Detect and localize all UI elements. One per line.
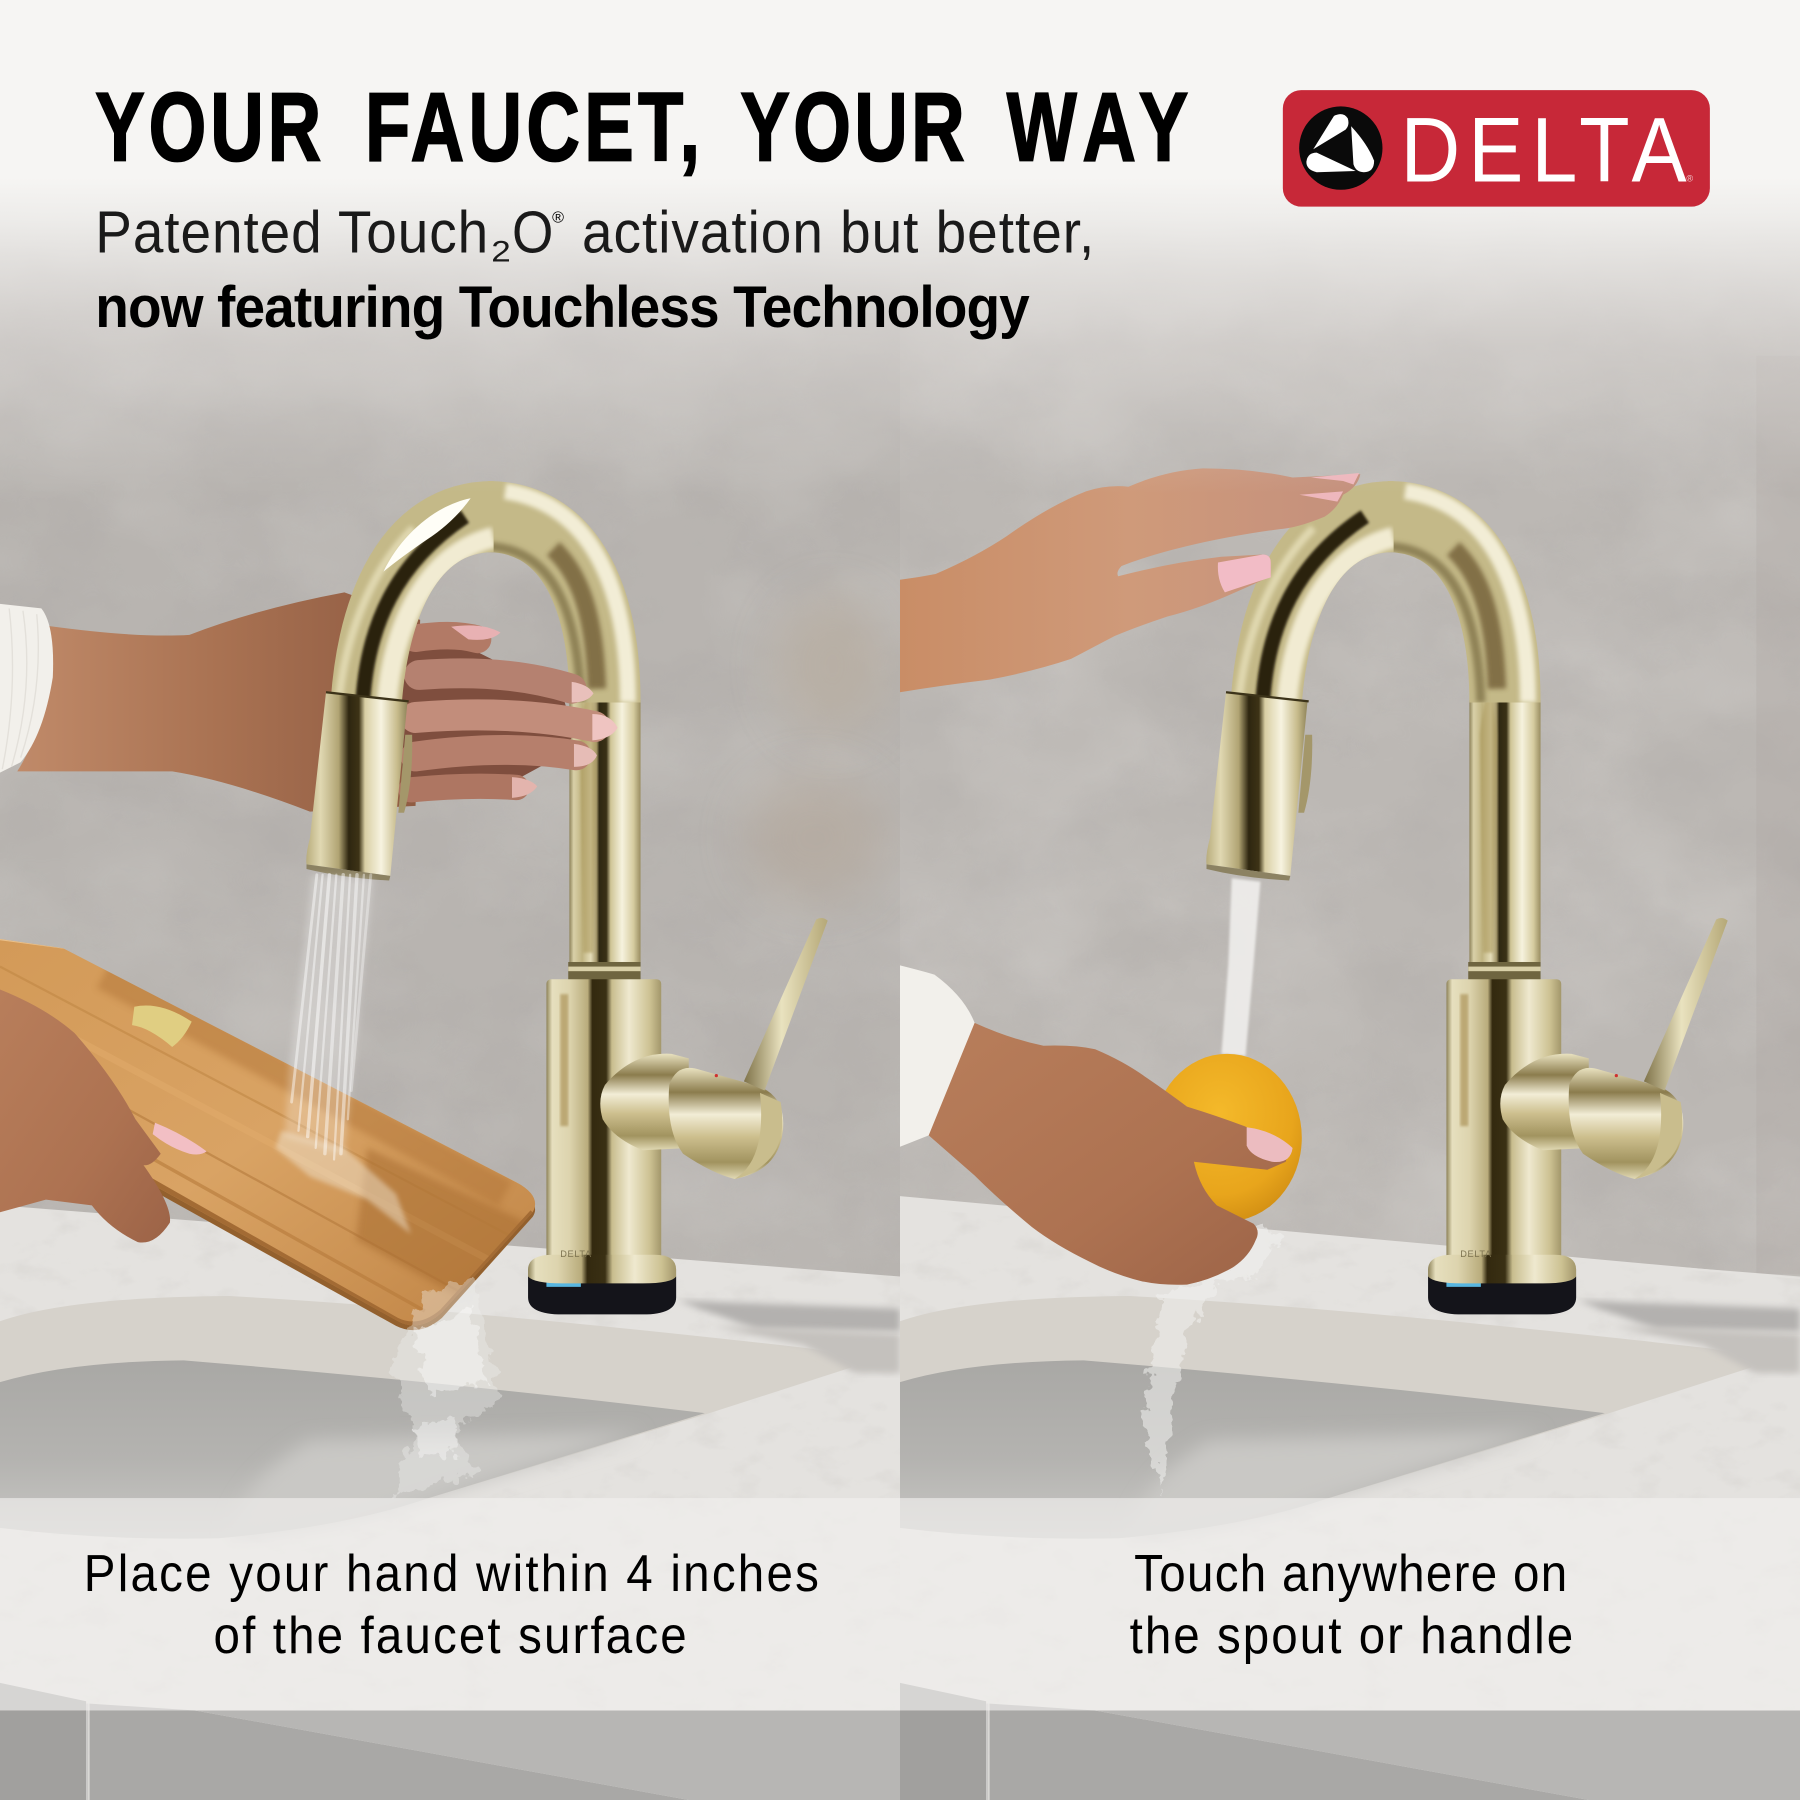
water splash below board bbox=[390, 1280, 499, 1495]
title bbox=[95, 74, 1188, 182]
nail: thumb bbox=[1218, 554, 1271, 592]
top fade overlay bbox=[0, 0, 1800, 494]
thumb nail bbox=[1247, 1127, 1293, 1162]
title: YOUR bbox=[740, 74, 965, 182]
sweater cuff: right bbox=[900, 965, 979, 1147]
wall: right bbox=[900, 0, 1800, 1286]
panel: left photo, hand near faucet bbox=[0, 226, 900, 1800]
title: YOUR bbox=[95, 74, 321, 182]
faucet column and base: left bbox=[488, 491, 828, 1314]
caption text: right bbox=[1130, 1544, 1573, 1665]
lemon slice on board bbox=[132, 1006, 192, 1047]
title: WAY bbox=[1007, 74, 1188, 182]
icon: Delta triangle mark bbox=[1299, 106, 1382, 190]
subtitle: O bbox=[512, 199, 553, 266]
faucet: right bbox=[1206, 491, 1728, 1314]
panel: right photo, hand touching faucet bbox=[900, 0, 1800, 1800]
countertop and sink: left bbox=[0, 1205, 900, 1800]
subtitle bbox=[95, 199, 1094, 341]
water runoff: right bbox=[1142, 1223, 1283, 1492]
fingers bbox=[402, 636, 595, 798]
caption band: left bbox=[0, 1498, 900, 1710]
lemon bbox=[1153, 1054, 1302, 1221]
faucet logo: left: DELTA bbox=[560, 1249, 592, 1259]
faucet logo: right: DELTA bbox=[1460, 1249, 1492, 1259]
logo: Delta: ® bbox=[1686, 173, 1693, 183]
subtitle: 2 bbox=[491, 236, 511, 269]
subtitle: ® bbox=[552, 209, 564, 227]
countertop and sink: right bbox=[900, 1196, 1800, 1800]
caption text: left bbox=[84, 1544, 819, 1665]
caption band: right bbox=[900, 1498, 1800, 1710]
sweater cuff: left bbox=[0, 604, 53, 773]
caption text: left: of the faucet surface bbox=[214, 1606, 687, 1665]
subtitle: now featuring Touchless Technology bbox=[95, 276, 1030, 341]
caption text: right: Touch anywhere on bbox=[1134, 1544, 1567, 1603]
water spray: left bbox=[285, 875, 373, 1159]
hand holding lemon bbox=[929, 1023, 1293, 1285]
lower hand holding board bbox=[0, 990, 207, 1243]
hand reaching through the spout bbox=[17, 592, 618, 812]
wall: left bbox=[0, 0, 900, 1286]
title: FAUCET, bbox=[365, 74, 700, 182]
hand touching top of spout bbox=[900, 468, 1360, 692]
caption text: left: Place your hand within 4 inches bbox=[84, 1544, 819, 1603]
wordmark: DELTA bbox=[1401, 98, 1687, 201]
caption text: right: the spout or handle bbox=[1130, 1606, 1573, 1665]
spout and pull-down head: left bbox=[306, 498, 494, 880]
water stream: right bbox=[1221, 878, 1260, 1056]
water pooling on board bbox=[276, 1131, 411, 1234]
subtitle: Patented Touch bbox=[95, 199, 488, 266]
nail: index fingers bbox=[1299, 473, 1359, 502]
logo: Delta bbox=[1283, 90, 1710, 207]
subtitle: activation but better, bbox=[582, 199, 1094, 266]
cutting board bbox=[0, 939, 540, 1330]
